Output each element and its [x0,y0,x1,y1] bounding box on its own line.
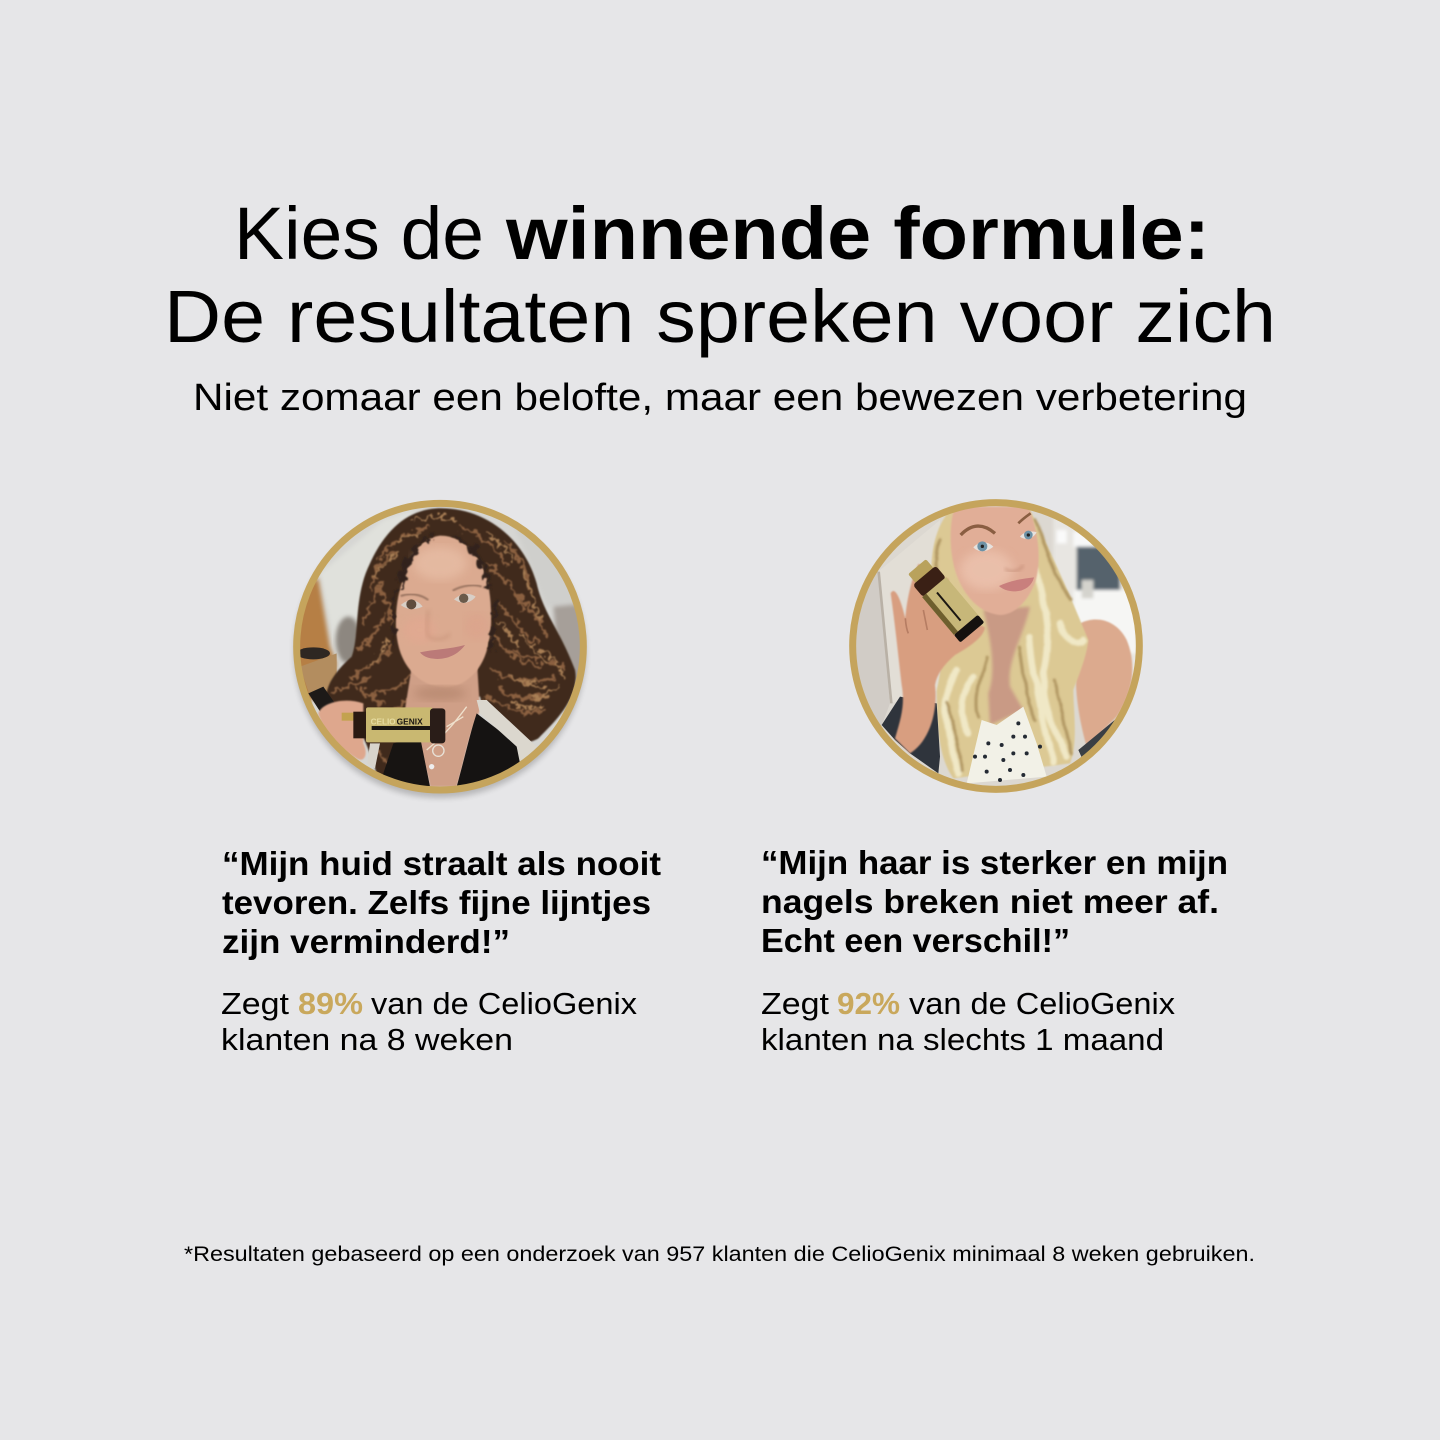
quote: hair and nails: “Mijn haar is sterker en mijn [761,844,1228,881]
portrait: woman with curly brown hair holding bottle [292,500,588,800]
statistic: 89%: van de CelioGenix [371,986,638,1021]
title: winnende formule: [505,192,1210,275]
hair back [931,510,1088,778]
window background [1053,519,1136,676]
neck and chest [403,657,480,787]
title [164,192,1276,358]
hair mass [326,508,576,783]
statistic: 92% [761,986,1176,1057]
quote: skin: zijn verminderd!” [222,923,510,960]
eyes, nose and mouth [401,585,482,659]
quote: skin: “Mijn huid straalt als nooit [222,845,661,882]
cardigan [882,697,940,773]
footnote: *Resultaten gebaseerd op een onderzoek van 957 klanten die CelioGenix minimaal 8 weken gebruiken. [184,1243,1255,1266]
quote: hair and nails [761,844,1228,959]
statistic: 92%: 92% [837,986,900,1021]
product bottle [905,557,984,643]
title: De resultaten spreken voor zich [164,275,1276,358]
portrait: blonde woman holding bottle [849,499,1143,793]
eyes, brows, nose and mouth [961,513,1037,591]
quote: hair and nails: Echt een verschil!” [761,922,1070,959]
finger gaps [905,610,927,633]
statistic: 92%: Zegt [761,986,829,1021]
hair curls [333,518,563,773]
shoulder and arm [1076,619,1132,747]
dotted top [967,707,1047,783]
gold ring [853,503,1139,789]
gold ring [297,503,583,790]
hair strands [937,520,1083,773]
product bottle: GENIX [397,717,423,727]
quote: skin [222,845,661,960]
statistic: 89%: Zegt [221,986,289,1021]
quote: hair and nails: nagels breken niet meer af. [761,883,1219,920]
hand [318,701,366,760]
statistic: 92%: van de CelioGenix [909,986,1176,1021]
title: Kies de [234,192,484,275]
statistic: 89% [221,986,638,1057]
face [396,536,491,687]
face [951,507,1039,615]
statistic: 89%: klanten na 8 weken [221,1022,513,1057]
product bottle [342,707,445,743]
statistic: 92%: klanten na slechts 1 maand [761,1022,1164,1057]
statistic: 89%: 89% [298,986,363,1021]
neck and chest [983,607,1030,725]
curls over face edge [393,537,495,650]
hand and forearm [891,564,985,753]
product bottle: CELIO [371,717,396,727]
quote: skin: tevoren. Zelfs fijne lijntjes [222,884,651,921]
subtitle: Niet zomaar een belofte, maar een bewezen verbetering [193,377,1247,419]
necklace [427,707,467,750]
jacket [383,742,430,786]
